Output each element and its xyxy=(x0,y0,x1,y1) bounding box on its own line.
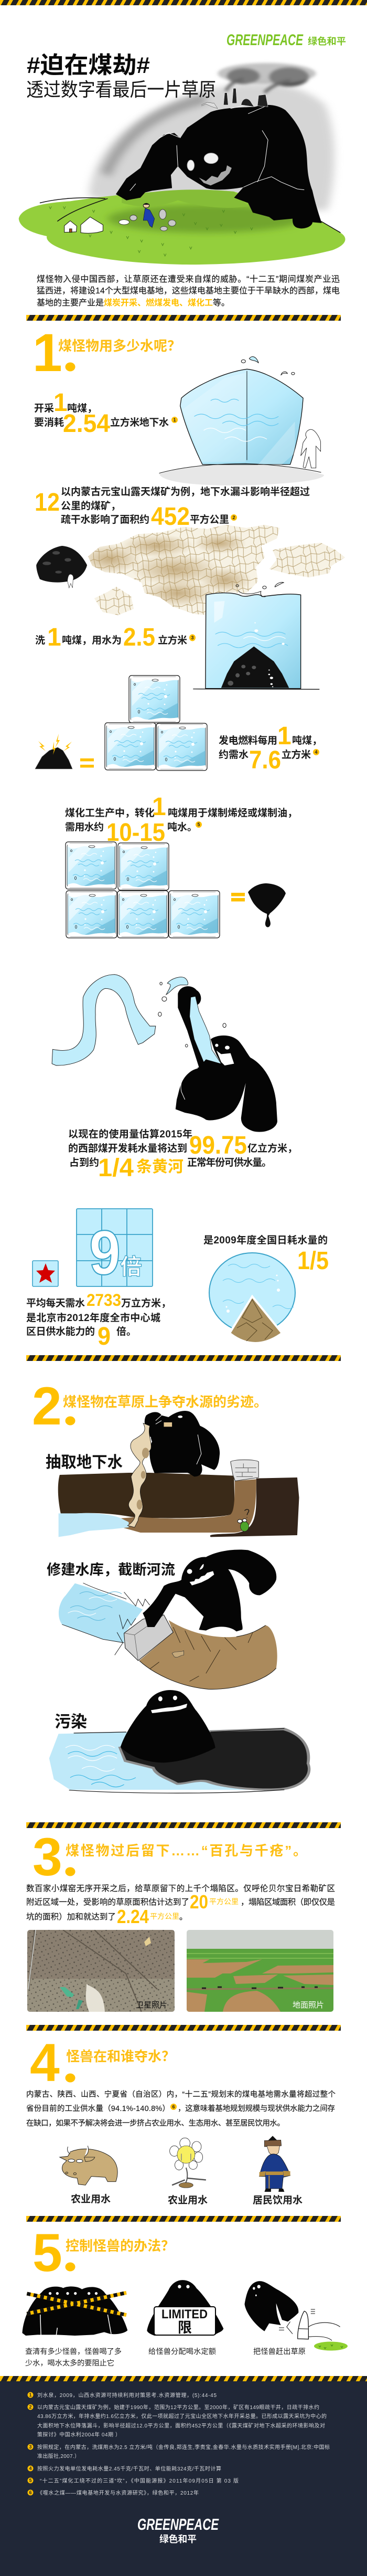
text: collapse areas: 。 xyxy=(179,1913,188,1922)
top hazard tape xyxy=(0,0,367,5)
section 2 heading: 煤怪物在草原上争夺水源的劣迹。 xyxy=(63,1394,267,1410)
hero illustration: coal monster over grassland xyxy=(19,63,345,265)
stat: washing 2.5: 洗 xyxy=(35,635,45,646)
footnote 2 xyxy=(27,2404,327,2438)
pie: water circle with dry slice xyxy=(209,1253,295,1343)
stat: 99.75 and quarter of Yellow River: 的西部煤开发耗水量将达到 xyxy=(68,1142,187,1154)
stat: mining 2.54 xyxy=(34,389,178,438)
text: collapse areas: 2.24 xyxy=(117,1906,149,1927)
stat: coal chemical 10-15: 1 xyxy=(152,793,166,821)
cut-off water xyxy=(59,1583,143,1643)
chart: nine-times grid xyxy=(33,1209,153,1288)
illustration: huge water block with person xyxy=(159,357,324,485)
factory smoke xyxy=(218,63,316,93)
section 2 heading: 2 xyxy=(32,1376,62,1436)
coal pile in block xyxy=(221,647,289,688)
footnote 3 xyxy=(27,2444,330,2459)
water arc at fist xyxy=(166,977,188,995)
stat: washing 2.5 xyxy=(35,624,196,651)
stat: 12 km funnel and 452 sq km: 疏干水影响了面积约 xyxy=(61,513,149,525)
footnote badge 5: 5 xyxy=(197,822,200,827)
intro text: 煤怪物入侵中国西部，让草原还在遭受来自煤的威胁。“十二五”期间煤炭产业迅 xyxy=(37,275,340,284)
dark earth xyxy=(58,1473,235,1518)
monster body xyxy=(116,105,322,228)
stat: washing 2.5: 立方米 xyxy=(158,634,187,646)
text: collapse areas: 平方公里 xyxy=(150,1912,179,1920)
splash spikes xyxy=(115,1592,150,1655)
footnote badge 4 xyxy=(313,749,319,755)
Beijing square with star xyxy=(33,1261,58,1286)
grass tufts xyxy=(49,206,253,256)
label: build dam: 修建水库，截断河流 xyxy=(47,1562,175,1578)
block highlights xyxy=(182,373,246,462)
black ink halo xyxy=(118,1728,310,1790)
stat: power generation 7.6 xyxy=(219,722,322,774)
stat: 2733 per day: 万立方米， xyxy=(121,1297,171,1309)
bulging straw of water xyxy=(127,1423,151,1527)
illustration: monster with LIMITED sign: 限 xyxy=(178,2320,192,2336)
stat: 99.75 and quarter of Yellow River: 条黄河 xyxy=(136,1158,183,1176)
text: collapse areas: ，塌陷区域面积（即仅仅是 xyxy=(241,1897,335,1907)
footnote badge 6: 6 xyxy=(172,2104,175,2109)
footnote 2: 大面积地下水位降落漏斗，影响半径超过12.0平方公里，面积约452平方公里（《露天煤矿对地下水超采的环境影响及对 xyxy=(37,2422,325,2429)
logo: Greenpeace top: GREENPEACE xyxy=(226,31,304,49)
label: pollution: 污染 xyxy=(55,1713,87,1731)
footnote 3: 准出版社,2007.） xyxy=(37,2453,80,2459)
footnote 2: 43.86万立方米，年排水量约1.6亿立方米，仅此一项就超过了元宝山全区地下水年开采总量。已形成以露天采坑为中心的 xyxy=(37,2413,327,2420)
section 1 heading: 1 xyxy=(33,323,62,383)
text: collapse areas xyxy=(26,1884,335,1927)
nine times label: 9 xyxy=(89,1218,121,1288)
illustration: monster sucks groundwater xyxy=(58,1411,299,1537)
text: collapse areas: 附近区域一处，受影响的草原面积估计达到了 xyxy=(26,1897,189,1907)
section 3 heading: 煤怪物过后留下……“百孔与千疮”。 xyxy=(66,1843,307,1859)
stat: 99.75 and quarter of Yellow River: 正常年份可供水量。 xyxy=(187,1156,272,1168)
photo: satellite view xyxy=(27,1930,175,2012)
footnote 1: 1 xyxy=(29,2392,32,2398)
section 4 heading: 怪兽在和谁夺水？ xyxy=(66,2049,175,2064)
dry tunnel xyxy=(117,1479,256,1533)
footnote 4: 4 xyxy=(29,2466,32,2471)
section 1 heading xyxy=(33,323,181,383)
stat: coal chemical 10-15: 需用水约 xyxy=(65,821,104,833)
footnote badge 3 xyxy=(189,634,196,641)
logo: Greenpeace top: 绿色和平 xyxy=(308,36,346,47)
sheep xyxy=(119,209,176,231)
stat: one fifth of national water: 是2009年度全国日耗水量的 xyxy=(203,1234,328,1246)
stat: 2733 per day: 2733 xyxy=(87,1291,121,1310)
herder xyxy=(143,203,155,227)
captions: solutions: 少水，喝水太多的要阻止它 xyxy=(25,2359,114,2368)
text: water competition: 省份目前的工业供水量（94.1%-140.8%） xyxy=(26,2104,170,2113)
stat: 12 km funnel and 452 sq km: 12 xyxy=(35,489,60,516)
section 3 heading xyxy=(33,1827,307,1887)
section 4 heading xyxy=(30,2033,175,2093)
labels: water users: 农业用水 xyxy=(168,2194,208,2206)
illustration: monster drinks the Yellow River xyxy=(52,975,277,1132)
footnote 2: 2 xyxy=(29,2404,32,2410)
splash xyxy=(238,590,266,597)
footnote badge 4: 4 xyxy=(315,749,318,755)
stat: 2733 per day: 倍。 xyxy=(116,1325,136,1337)
illustration: crying flower xyxy=(170,2138,206,2188)
stat: washing 2.5: 1 xyxy=(47,624,61,651)
footnote badge 2: 2 xyxy=(232,515,235,520)
monster xyxy=(121,1690,215,1762)
black ink xyxy=(121,1730,308,1789)
monster mouth xyxy=(199,165,232,185)
illustration: monster dams river xyxy=(59,1549,277,1689)
nine times label: 倍 xyxy=(120,1254,142,1279)
text: collapse areas: 坑的面积）加和就达到了 xyxy=(26,1912,116,1922)
labels: water users: 居民饮用水 xyxy=(253,2194,303,2206)
section 4 heading: 4 xyxy=(30,2033,60,2093)
text: water competition: 在缺口，如果不予解决将会进一步挤占农业用水、生态用水、甚至居民饮用水。 xyxy=(26,2119,285,2128)
title: 透过数字看最后一片草原 xyxy=(26,79,216,100)
text: water competition xyxy=(26,2090,336,2128)
stat: 2733 per day: 平均每天需水 xyxy=(26,1297,85,1309)
illustration: ox xyxy=(60,2146,117,2185)
illustration: coal being washed in water block xyxy=(193,582,319,689)
equals sign xyxy=(80,758,94,767)
captions: solutions: 把怪兽赶出草原 xyxy=(253,2348,306,2356)
stat: power generation 7.6: 发电燃料每用 xyxy=(219,734,277,746)
section 3 heading: 3 xyxy=(33,1827,62,1887)
footnote badge 1: 1 xyxy=(173,417,176,423)
labels: water users xyxy=(71,2193,303,2206)
footnote badge 1 xyxy=(171,417,178,423)
water drops xyxy=(241,357,295,375)
divider xyxy=(26,315,341,321)
ink wash background xyxy=(89,83,334,217)
stat: mining 2.54: 1 xyxy=(53,389,68,417)
stat: coal chemical 10-15: 吨水。 xyxy=(167,821,197,833)
caption: 地面照片 xyxy=(293,2001,324,2010)
stat: 12 km funnel and 452 sq km: 公里的煤矿， xyxy=(61,500,121,512)
footnote 2: 以内蒙古元宝山露天煤矿为例，始建于1990年，范围为12平方公里。至2000年，矿区有149眼疏干井，日疏干排水约 xyxy=(37,2404,319,2411)
footnote 3: 按照规定，在内蒙古，洗煤用水为2.5 立方米/吨（金传良,郑连生,李贵宝,金春华.水量与水质技术实用手册[M].北京:中国标 xyxy=(37,2444,330,2451)
icon: coal oil drop xyxy=(248,883,286,927)
sign xyxy=(154,2307,215,2335)
stat: 99.75 and quarter of Yellow River: 亿立方米， xyxy=(247,1142,297,1154)
footnote badge 5 xyxy=(196,821,202,828)
divider xyxy=(26,2216,341,2222)
well xyxy=(231,1460,258,1481)
captions: solutions: 查清有多少怪兽，怪兽喝了多 xyxy=(25,2347,122,2356)
yurts xyxy=(64,217,103,233)
section 5 heading: 5 xyxy=(33,2223,62,2283)
footnote 6: 《噬水之煤——煤电基地开发与水资源研究》，绿色和平，2012年 xyxy=(37,2489,199,2496)
monster xyxy=(145,1411,220,1476)
footnote 1: 刘水泉，2009，山西水资源可持续利用对策思考.水资源管理，(5):44-45 xyxy=(37,2392,217,2399)
dry riverbed xyxy=(139,1620,277,1689)
road lines on hill xyxy=(40,198,107,221)
section 2 heading xyxy=(32,1376,267,1436)
illustration: cracked dry earth xyxy=(88,525,345,615)
logo: Greenpeace bottom: GREENPEACE xyxy=(137,2515,219,2533)
footnote 5: 5 xyxy=(29,2478,32,2483)
photo: ground view xyxy=(187,1930,333,2012)
small person xyxy=(301,429,321,468)
stat: 99.75 and quarter of Yellow River: 以现在的使用量估算2015年 xyxy=(68,1128,192,1140)
stat: coal chemical 10-15 xyxy=(65,793,297,847)
stat: 2733 per day: 9 xyxy=(98,1323,111,1350)
stat: mining 2.54: 立方米地下水 xyxy=(110,416,169,428)
logo: Greenpeace bottom xyxy=(137,2515,219,2545)
stat: 99.75 and quarter of Yellow River xyxy=(68,1128,297,1182)
footnote 5: “十二五”煤化工绕不过的三道“坎”，《中国能源报》2011年09月05日 第 03 版 xyxy=(40,2477,239,2484)
stat: coal chemical 10-15: 10-15 xyxy=(106,819,165,847)
intro text: 猛西进，将建设14个大型煤电基地，这些煤电基地主要位于干旱缺水的西部，煤电 xyxy=(37,286,340,295)
footnote 2: 策探讨》中国水利2004年 04期 ） xyxy=(37,2431,121,2438)
caption: 卫星照片 xyxy=(136,2001,167,2010)
dry slice xyxy=(230,1296,282,1343)
concrete dam xyxy=(124,1615,173,1661)
text: collapse areas: 数百家小煤窑无序开采之后，给草原留下的上千个塌陷区。仅呼伦贝尔宝日希勒矿区 xyxy=(26,1884,335,1893)
factories on monster head xyxy=(201,88,268,109)
hill shadow xyxy=(107,205,304,233)
stat: 2733 per day xyxy=(26,1291,171,1350)
footnote 3: 3 xyxy=(29,2444,32,2450)
captions: solutions: 给怪兽分配喝水定额 xyxy=(148,2348,216,2356)
illustration: monster with LIMITED sign: LIMITED xyxy=(161,2307,208,2321)
footer panel xyxy=(0,2381,367,2576)
intro text: 基地的主要产业是煤炭开采、燃煤发电、煤化工等。 xyxy=(37,298,230,308)
stat: 2733 per day: 区日供水能力的 xyxy=(26,1326,95,1337)
nine times label xyxy=(89,1218,142,1288)
title: #迫在煤劫# xyxy=(27,52,150,78)
illustration: monster with LIMITED sign xyxy=(147,2280,223,2336)
stat: 12 km funnel and 452 sq km: 以内蒙古元宝山露天煤矿为例，地下水漏斗影响半径超过 xyxy=(61,485,310,498)
stat: mining 2.54: 2.54 xyxy=(63,410,110,438)
stat: 2733 per day: 是北京市2012年度全市中心城 xyxy=(26,1312,160,1324)
monster white contour lines xyxy=(130,105,304,191)
boot and leg xyxy=(298,2311,308,2339)
stat: 12 km funnel and 452 sq km: 452 xyxy=(151,503,190,531)
illustration: three monsters behind caution tape xyxy=(22,2286,127,2336)
frog xyxy=(238,1509,249,1532)
stat: 99.75 and quarter of Yellow River: 99.75 xyxy=(189,1132,247,1159)
stat: mining 2.54: 开采 xyxy=(34,403,54,414)
title xyxy=(26,52,216,100)
illustration: coal lump with small person xyxy=(36,546,87,588)
stat: one fifth of national water: 1/5 xyxy=(297,1247,329,1275)
section 5 heading: 控制怪兽的办法？ xyxy=(66,2238,175,2254)
text: water competition: 内蒙古、陕西、山西、宁夏省（自治区）内，“十二五”规划末的煤电基地需水量将超过整个 xyxy=(26,2090,336,2099)
stat: 12 km funnel and 452 sq km: 平方公里 xyxy=(190,513,229,525)
nine-square block xyxy=(77,1209,153,1286)
stat: power generation 7.6: 吨煤， xyxy=(292,735,322,746)
river banks xyxy=(69,1728,284,1793)
stat: mining 2.54: 吨煤， xyxy=(67,403,97,414)
river water xyxy=(49,1728,309,1790)
monster mouth and eyes xyxy=(215,1044,234,1065)
text: collapse areas: 20 xyxy=(190,1891,208,1913)
ground xyxy=(159,463,324,485)
stat: power generation 7.6: 1 xyxy=(277,722,292,750)
footnote 4: 按照火力发电单位发电耗水量2.45千克/千瓦时、单位能耗324克/千瓦时计算 xyxy=(37,2465,221,2472)
water down arm xyxy=(190,996,221,1064)
grassland hill xyxy=(19,190,345,265)
captions: solutions xyxy=(25,2347,306,2368)
illustration: monster pollutes river xyxy=(49,1690,310,1793)
divider xyxy=(26,1355,341,1361)
water blocks: five for coal chemical xyxy=(66,842,220,938)
equals sign xyxy=(231,893,245,902)
footnote 6: 6 xyxy=(29,2490,32,2495)
section 1 heading: 煤怪物用多少水呢？ xyxy=(58,338,181,354)
caution tapes xyxy=(27,2293,126,2315)
river xyxy=(52,975,156,1065)
icon: coal with lightning xyxy=(35,734,72,769)
logo: Greenpeace bottom: 绿色和平 xyxy=(159,2534,197,2545)
monster eyes xyxy=(187,153,218,171)
stat: mining 2.54: 要消耗 xyxy=(34,417,64,428)
monster arm xyxy=(178,986,210,1067)
intro text xyxy=(37,275,340,308)
stat: 99.75 and quarter of Yellow River: 1/4 xyxy=(98,1154,134,1182)
stat: power generation 7.6: 7.6 xyxy=(249,746,281,774)
stat: 99.75 and quarter of Yellow River: 占到约 xyxy=(69,1157,99,1168)
stat: coal chemical 10-15: 吨煤用于煤制烯烃或煤制油， xyxy=(168,807,297,819)
labels: water users: 农业用水 xyxy=(71,2193,111,2205)
water blocks: three for power generation xyxy=(105,675,207,770)
illustration: herder in robe xyxy=(260,2136,290,2192)
stat: one fifth of national water xyxy=(203,1234,329,1275)
stat: power generation 7.6: 约需水 xyxy=(219,749,249,761)
tan stains xyxy=(79,533,252,607)
icon: grass patch xyxy=(314,2342,348,2350)
divider xyxy=(26,2025,341,2031)
stat: washing 2.5: 2.5 xyxy=(123,624,155,651)
stranded fish xyxy=(172,1651,183,1657)
stat: coal chemical 10-15: 煤化工生产中，转化 xyxy=(65,807,155,819)
underground water xyxy=(59,1513,129,1537)
section 5 heading xyxy=(33,2223,175,2283)
monster body xyxy=(176,1036,277,1132)
bottom hazard tape xyxy=(0,2376,367,2381)
illustration: monster kicked off the grassland xyxy=(244,2281,340,2340)
label: pump groundwater: 抽取地下水 xyxy=(46,1454,123,1471)
bubbles xyxy=(158,982,226,1047)
text: collapse areas: 平方公里 xyxy=(209,1897,239,1906)
stat: power generation 7.6: 立方米 xyxy=(282,748,311,761)
stat: 12 km funnel and 452 sq km xyxy=(35,485,310,531)
stat: washing 2.5: 吨煤，用水为 xyxy=(62,635,122,646)
monster xyxy=(143,1549,276,1631)
footnote badge 2 xyxy=(231,514,237,521)
footnote badge 6 xyxy=(170,2104,177,2110)
footnote badge 3: 3 xyxy=(191,635,194,640)
text: water competition: ，这意味着基地规划规模与现状供水能力之间存 xyxy=(178,2104,335,2113)
divider xyxy=(26,1822,341,1828)
